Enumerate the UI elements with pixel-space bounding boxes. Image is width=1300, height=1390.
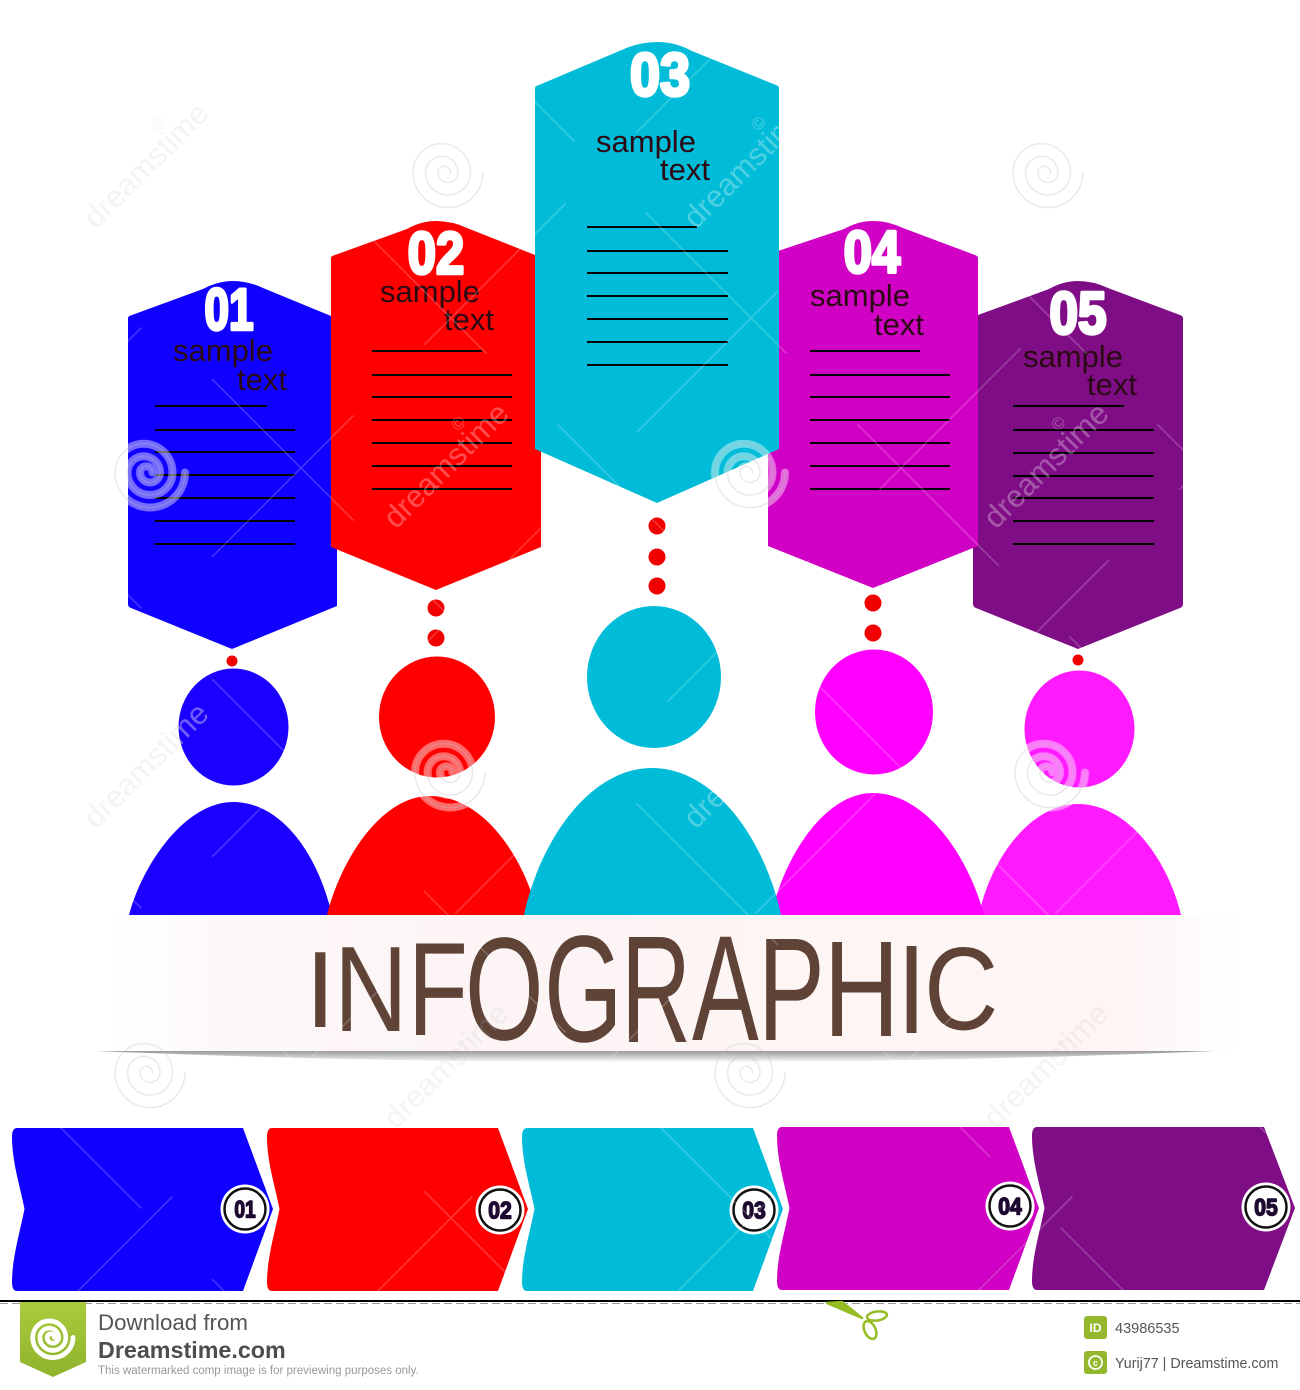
arrow 03	[522, 1128, 783, 1291]
arrow 02	[267, 1128, 528, 1291]
number 02: 02	[408, 220, 464, 286]
connector dots	[226, 518, 1084, 666]
sample text 05: text	[1087, 367, 1137, 402]
text lines 02	[372, 351, 512, 489]
badge 04	[986, 1182, 1034, 1230]
title: INFOGRAPHIC: R	[621, 905, 691, 1075]
footer logo ribbon	[20, 1302, 86, 1377]
sample text 02: sample	[380, 274, 480, 309]
image credit	[1084, 1351, 1278, 1374]
panel 03	[535, 42, 779, 503]
person 04	[771, 650, 984, 915]
person 01	[129, 668, 332, 915]
footer cut line	[0, 1301, 1300, 1304]
image id	[1084, 1316, 1180, 1339]
text lines 01	[155, 406, 295, 544]
watermark: dreamstime text	[76, 96, 1115, 1135]
watermark: dreamstime text: ©	[147, 712, 170, 735]
watermark: dreamstime text: dreamstime	[76, 696, 215, 835]
badge 04: 04	[998, 1193, 1022, 1220]
panel 01	[128, 277, 337, 649]
sample text 01: sample	[173, 333, 273, 368]
title: INFOGRAPHIC: H	[824, 913, 899, 1065]
watermark: dreamstime text: ©	[147, 112, 170, 135]
image credit: Yurij77 | Dreamstime.com	[1115, 1356, 1278, 1372]
title: INFOGRAPHIC: A	[692, 906, 759, 1073]
person 03	[524, 606, 781, 915]
footer download text: This watermarked comp image is for previewing purposes only.	[98, 1365, 419, 1377]
arrow 04	[777, 1127, 1039, 1290]
title: INFOGRAPHIC: N	[334, 921, 408, 1057]
watermark: dreamstime text: dreamstime	[76, 96, 215, 235]
sample text 05	[1023, 339, 1137, 402]
panel 05	[973, 280, 1183, 649]
title: INFOGRAPHIC: C	[924, 924, 998, 1055]
badge 02: 02	[488, 1197, 512, 1224]
arrow 01	[12, 1128, 273, 1291]
watermark: dreamstime text: ©	[1047, 412, 1070, 435]
footer download text	[98, 1310, 419, 1377]
badge 05: 05	[1254, 1194, 1278, 1221]
text lines 05	[1013, 406, 1154, 544]
number 04: 04	[844, 219, 901, 285]
sample text 03	[596, 124, 710, 187]
watermark: dreamstime text: dreamstime	[976, 996, 1115, 1135]
text lines 04	[810, 351, 950, 489]
title: INFOGRAPHIC: I	[897, 919, 926, 1060]
sample text 04	[810, 278, 924, 342]
title: INFOGRAPHIC: P	[758, 907, 825, 1072]
footer download text: Download from	[98, 1310, 248, 1335]
sample text 04: text	[874, 307, 924, 342]
icon: spiral	[33, 1321, 73, 1358]
watermark: dreamstime text: ©	[447, 412, 470, 435]
title: INFOGRAPHIC	[305, 905, 998, 1075]
title: INFOGRAPHIC: I	[305, 929, 336, 1051]
sample text 02: text	[444, 302, 494, 337]
image id: ID	[1090, 1321, 1102, 1335]
sample text 01	[173, 333, 287, 397]
sample text 03: sample	[596, 124, 696, 159]
watermark: dreamstime text: dreamstime	[676, 96, 815, 235]
badge 03	[730, 1186, 778, 1234]
person 02	[327, 656, 538, 915]
image id: 43986535	[1115, 1321, 1180, 1337]
badge 01	[220, 1184, 270, 1234]
watermark: dreamstime text: dreamstime	[376, 996, 515, 1135]
sample text 03: text	[660, 152, 710, 187]
watermark: dreamstime text: ©	[747, 712, 770, 735]
panel 02	[331, 220, 541, 590]
title: INFOGRAPHIC: G	[544, 905, 623, 1074]
footer download text: Dreamstime.com	[98, 1337, 286, 1363]
number 03: 03	[630, 42, 690, 109]
title banner	[95, 905, 1240, 1075]
panel 04	[768, 219, 978, 588]
watermark: dreamstime text: dreamstime	[676, 696, 815, 835]
watermark: dreamstime text: dreamstime	[976, 396, 1115, 535]
watermark: dreamstime text: dreamstime	[76, 696, 215, 835]
watermark: dreamstime text: dreamstime	[376, 396, 515, 535]
number 05: 05	[1049, 280, 1107, 346]
person 05	[979, 670, 1181, 915]
sample text 04: sample	[810, 278, 910, 313]
arrow 05	[1032, 1127, 1295, 1290]
watermark: spirals	[115, 144, 1085, 1108]
badge 01: 01	[234, 1195, 256, 1223]
badge 03: 03	[742, 1197, 766, 1224]
icon: scissors	[827, 1302, 888, 1341]
badge 02	[476, 1186, 524, 1234]
text lines 03	[587, 227, 728, 365]
title: INFOGRAPHIC: O	[465, 907, 544, 1071]
watermark: dreamstime text: ©	[747, 112, 770, 135]
image credit: c	[1093, 1358, 1098, 1368]
sample text 05: sample	[1023, 339, 1123, 374]
sample text 01: text	[237, 362, 287, 397]
title: INFOGRAPHIC: F	[408, 914, 468, 1063]
number 01: 01	[204, 277, 254, 342]
badge 05	[1242, 1182, 1290, 1232]
sample text 02	[380, 274, 494, 337]
